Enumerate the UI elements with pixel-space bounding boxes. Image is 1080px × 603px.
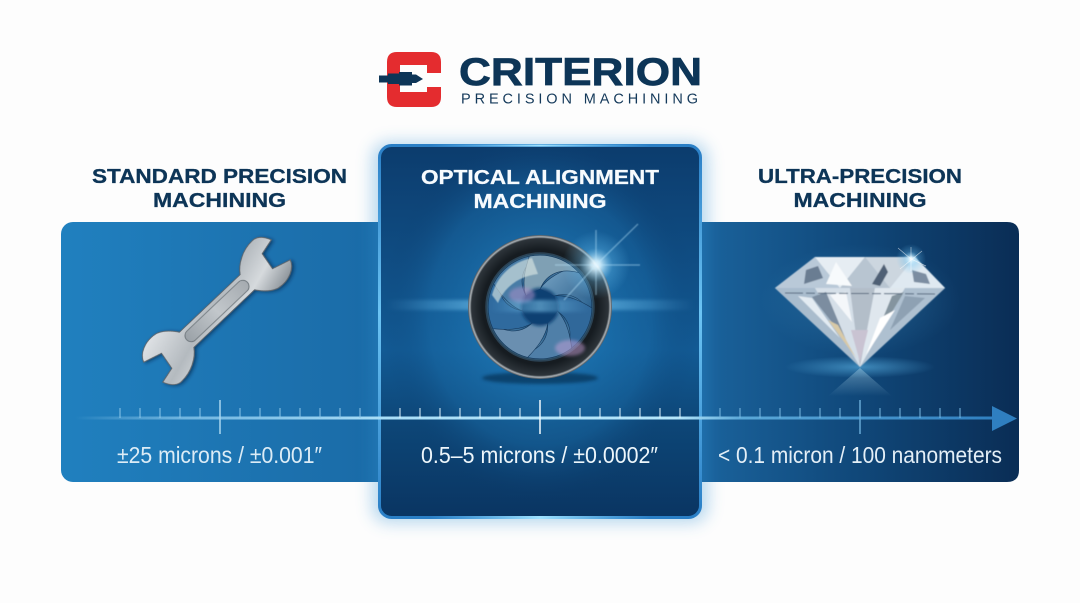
- heading: ultra-precision: MACHINING: [794, 190, 926, 212]
- panel background: [690, 222, 1019, 482]
- panel background: [380, 146, 700, 518]
- tick marks: [120, 408, 360, 418]
- axis line: [75, 416, 1000, 420]
- tagline: PRECISION MACHINING: [461, 92, 698, 108]
- precision scale arrow: [75, 400, 1017, 434]
- panel: standard precision machining: [61, 166, 391, 482]
- icon: camera lens: [385, 224, 695, 384]
- measurement: optical tolerance: 0.5–5 microns / ±0.0002″: [421, 442, 658, 468]
- measurement: standard tolerance: ±25 microns / ±0.001″: [117, 442, 322, 468]
- icon: red C with spindle: [379, 52, 441, 107]
- heading: optical alignment: OPTICAL ALIGNMENT: [421, 167, 659, 189]
- heading: optical alignment: MACHINING: [474, 191, 606, 213]
- wordmark: CRITERION: [459, 51, 702, 94]
- panel: optical alignment machining: [372, 142, 708, 523]
- icon: wrench: [135, 231, 299, 391]
- measurement: ultra tolerance: < 0.1 micron / 100 nanometers: [718, 442, 1002, 468]
- panel: ultra-precision machining: [690, 166, 1019, 482]
- bottom highlight: [430, 516, 650, 519]
- heading: standard precision: MACHINING: [153, 190, 286, 212]
- heading: ultra-precision: ULTRA-PRECISION: [758, 166, 962, 188]
- top highlight: [430, 144, 650, 146]
- panel glow: [372, 142, 708, 523]
- panel background: [61, 222, 391, 482]
- logo: Criterion Precision Machining: [379, 51, 702, 108]
- arrowhead: [992, 406, 1017, 431]
- heading: standard precision: STANDARD PRECISION: [92, 166, 347, 188]
- icon: diamond: [760, 244, 960, 396]
